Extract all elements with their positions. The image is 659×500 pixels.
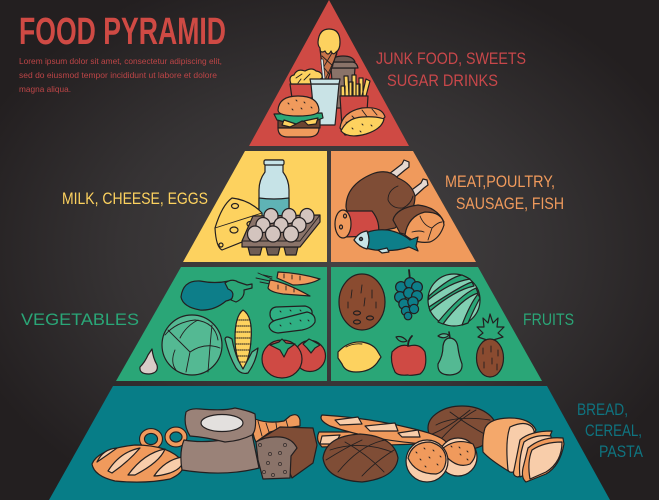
icon: taco (340, 108, 385, 136)
label: meat: MEAT,POULTRY, (445, 172, 555, 191)
icon: fries (340, 75, 370, 127)
icon: round white loaf (92, 445, 183, 482)
label: meat: SAUSAGE, FISH (456, 194, 564, 213)
label: junk food (376, 49, 526, 90)
icon: milk bottle (259, 160, 289, 220)
icon: ham (393, 205, 444, 242)
icon: grapes (395, 270, 422, 320)
panel: dairy (183, 151, 327, 262)
intro text: Lorem ipsum dolor sit amet, consectetur adipiscing elit, (19, 56, 222, 66)
icon: pineapple (476, 314, 504, 377)
label: breads (577, 400, 644, 461)
label: fruits: FRUITS (523, 310, 574, 329)
label: breads: PASTA (599, 442, 644, 461)
label: breads: BREAD, (577, 400, 628, 419)
intro text: magna aliqua. (19, 84, 71, 94)
icon: lemon (338, 342, 381, 372)
icon: pear (438, 332, 462, 375)
icon: cabbage (162, 315, 222, 375)
intro text: sed do eiusmod tempor incididunt ut labore et dolore (19, 70, 217, 80)
icon: apple (391, 336, 426, 375)
icon: croissant (253, 415, 300, 442)
icon: egg tray (242, 208, 320, 255)
icon: corn (225, 310, 258, 373)
panel: fruits (331, 267, 542, 381)
icon: coconut (339, 274, 385, 330)
panel: junk food (249, 0, 409, 146)
icon: flour sack (181, 408, 259, 473)
icon: baguettes (318, 415, 447, 447)
icon: burger (274, 96, 323, 137)
icon: soda cup (310, 60, 340, 125)
intro text (19, 56, 222, 94)
icon: garlic (140, 349, 157, 374)
label: dairy: MILK, CHEESE, EGGS (62, 189, 208, 208)
icon: sliced loaf (483, 418, 564, 482)
icon: cheese (215, 198, 262, 250)
panel: vegetables (116, 267, 327, 381)
icon: watermelon (428, 274, 480, 326)
icon: coffee cup (328, 56, 358, 108)
icon: tomatoes (262, 339, 326, 378)
icon: popcorn box (290, 69, 322, 98)
icon: buns (406, 438, 477, 482)
label: junk food: SUGAR DRINKS (387, 71, 498, 90)
icon: eggplant (181, 280, 252, 310)
icon: cucumbers (269, 306, 315, 333)
panel: meat (331, 151, 476, 262)
icon: ice cream (318, 29, 340, 82)
panel: breads (49, 386, 610, 500)
icon: dark round loaf (323, 434, 398, 482)
label: breads: CEREAL, (585, 421, 642, 440)
icon: rear dark loaf (428, 406, 496, 450)
icon: fish (354, 230, 418, 253)
icon: carrots (256, 272, 320, 296)
icon: roast chicken (346, 160, 428, 232)
icon: pretzel (142, 430, 184, 447)
label: meat (445, 172, 564, 213)
icon: rye loaf (256, 427, 317, 479)
title: FOOD PYRAMID (19, 11, 226, 53)
label: vegetables: VEGETABLES (21, 310, 139, 329)
label: junk food: JUNK FOOD, SWEETS (376, 49, 526, 68)
icon: sausage (335, 210, 379, 238)
